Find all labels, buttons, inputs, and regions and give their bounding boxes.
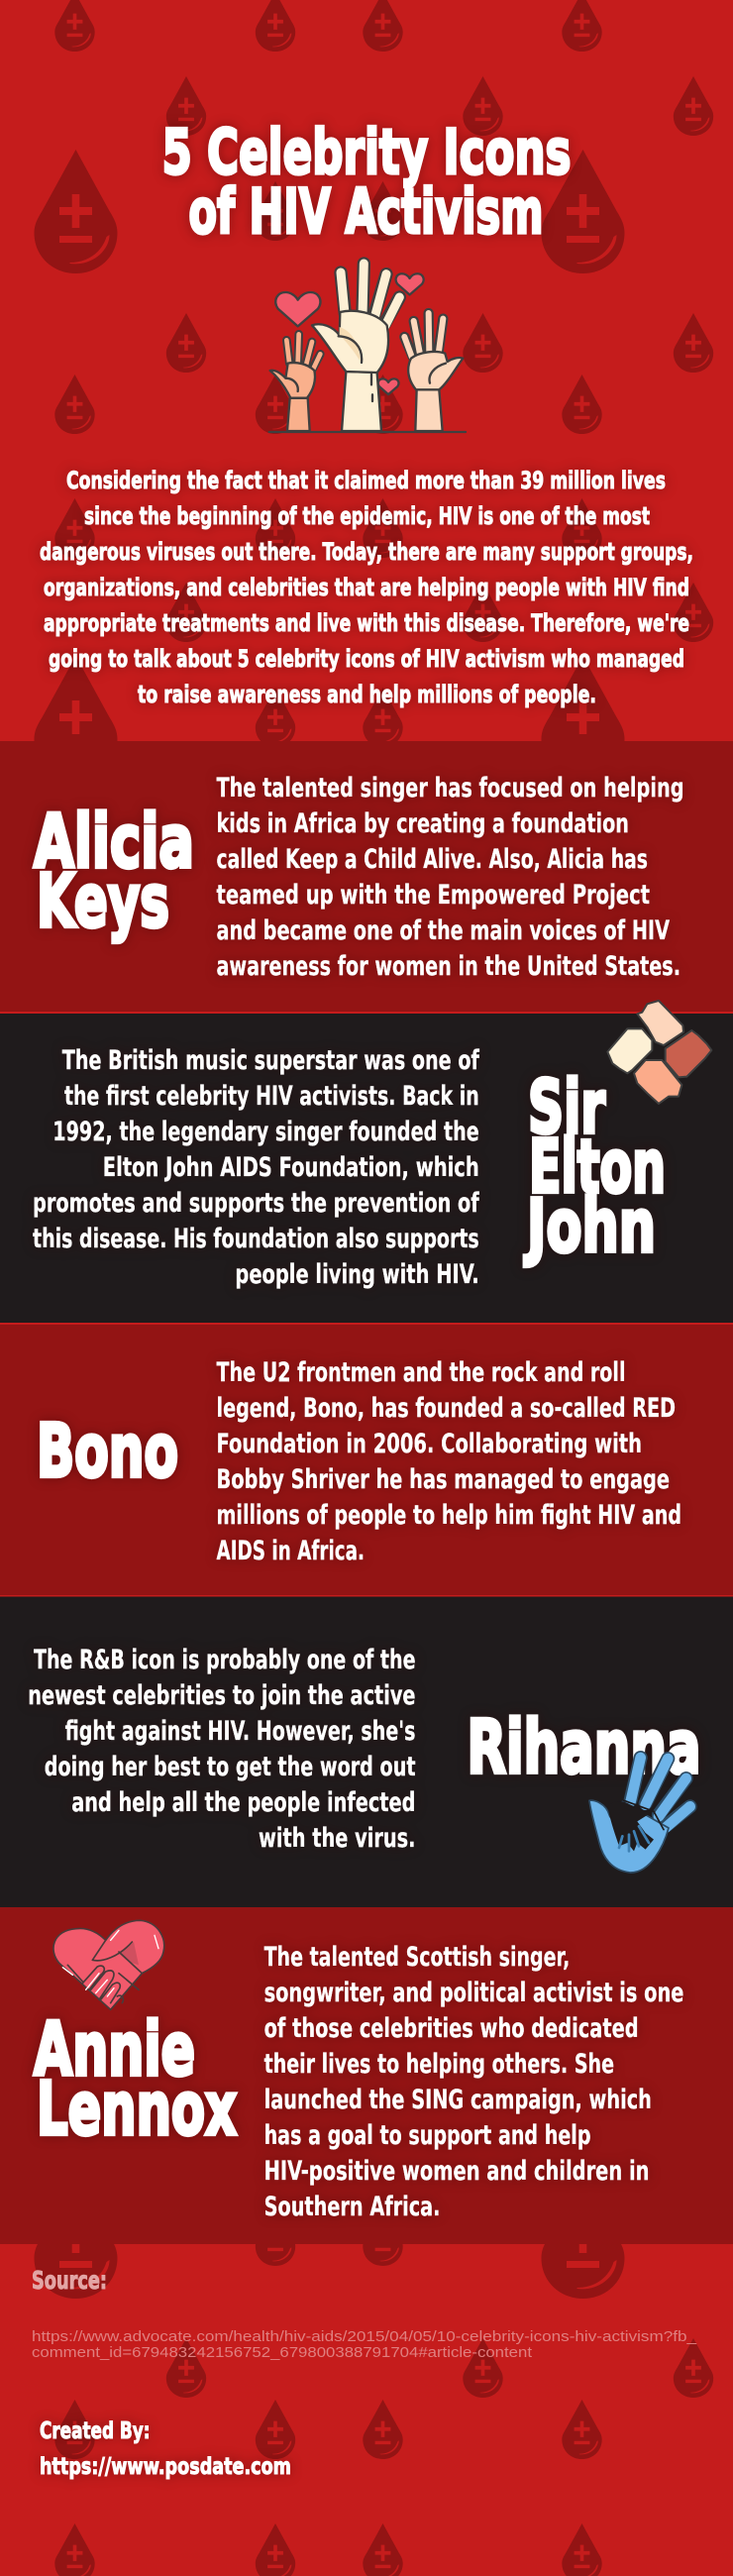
icon part: top hand: [637, 1001, 683, 1045]
icon: blue hand holding small hand: [589, 1758, 690, 1873]
text: Elton John description: people living with HIV.: [235, 1259, 479, 1290]
credit: https://www.posdate.com: [40, 2454, 291, 2480]
panel: Sir Elton John: [0, 1001, 733, 1325]
name: Alicia Keys: Keys: [37, 859, 169, 944]
text: Bono description: AIDS in Africa.: [216, 1536, 365, 1566]
text: Annie Lennox description: [264, 1942, 683, 2222]
text: Bono description: [216, 1357, 681, 1566]
text: Elton John description: Elton John AIDS Foundation, which: [103, 1152, 479, 1183]
text: Rihanna description: fight against HIV. However, she's: [65, 1716, 415, 1747]
icon part: left hand: [607, 1028, 652, 1073]
source link: https://www.advocate.com/health/hiv-aids/2015/04/05/10-celebrity-icons-hiv-activism?fb_: [32, 2328, 697, 2345]
icon part: large heart: [275, 292, 320, 326]
text: Rihanna description: doing her best to get the word out: [45, 1752, 416, 1782]
panel: Bono: [0, 1325, 733, 1596]
name: Annie Lennox: [34, 2007, 237, 2152]
icon part: left hand: [270, 334, 320, 431]
panel: Annie Lennox: [0, 1907, 733, 2244]
credit: Created By:: [40, 2418, 151, 2444]
source heading: Source:: [32, 2266, 107, 2295]
icon part: bottom hand: [634, 1060, 681, 1104]
icon part: top right heart: [396, 273, 424, 295]
icon: handshake heart: [53, 1920, 164, 2009]
name: Sir Elton John: [523, 1065, 666, 1269]
text: Rihanna description: The R&B icon is probably one of the: [34, 1645, 416, 1675]
text: Alicia Keys description: [216, 773, 683, 982]
source link: [32, 2328, 697, 2361]
panel: Rihanna: [0, 1595, 733, 1907]
text: Rihanna description: newest celebrities to join the active: [28, 1680, 416, 1711]
text: Elton John description: this disease. His foundation also supports: [33, 1224, 479, 1254]
panel: Alicia Keys: [0, 741, 733, 1013]
icon part: middle hand: [312, 264, 399, 431]
name: Bono: Bono: [37, 1409, 178, 1494]
intro paragraph: [40, 467, 693, 708]
text: Rihanna description: with the virus.: [259, 1823, 416, 1854]
text: Annie Lennox description: Southern Africa.: [264, 2192, 440, 2222]
icon: raised hands with hearts: [269, 264, 466, 432]
text: Elton John description: The British music superstar was one of: [62, 1045, 479, 1076]
text: Annie Lennox description: has a goal to support and help: [264, 2120, 590, 2151]
credit: [40, 2418, 291, 2480]
icon part: ground line: [269, 428, 466, 435]
icon part: right hand: [404, 313, 463, 431]
text: Elton John description: the first celebrity HIV activists. Back in: [64, 1081, 479, 1112]
title: 5 Celebrity Icons: [162, 116, 571, 188]
icon: four joined hands: [607, 1001, 711, 1104]
name: Annie Lennox: Annie: [34, 2007, 195, 2093]
text: Elton John description: promotes and supports the prevention of: [33, 1188, 479, 1219]
name: Sir Elton John: John: [523, 1184, 656, 1269]
icon part: right hand: [666, 1030, 711, 1077]
name: Alicia Keys: Alicia: [34, 800, 194, 885]
name: Alicia Keys: [34, 800, 194, 944]
title: [162, 116, 571, 248]
text: Rihanna description: [28, 1645, 416, 1854]
name: Annie Lennox: Lennox: [37, 2067, 237, 2152]
source link: comment_id=679483242156752_679800388791704#article-content: [32, 2344, 533, 2361]
title: of HIV Activism: [188, 175, 543, 248]
text: Elton John description: 1992, the legendary singer founded the: [52, 1117, 479, 1147]
text: Elton John description: [33, 1045, 479, 1290]
icon part: small heart: [378, 378, 398, 394]
text: Rihanna description: and help all the people infected: [71, 1787, 415, 1818]
text: Annie Lennox description: The talented Scottish singer,: [264, 1942, 570, 1973]
name: Sir Elton John: Sir: [528, 1065, 605, 1150]
